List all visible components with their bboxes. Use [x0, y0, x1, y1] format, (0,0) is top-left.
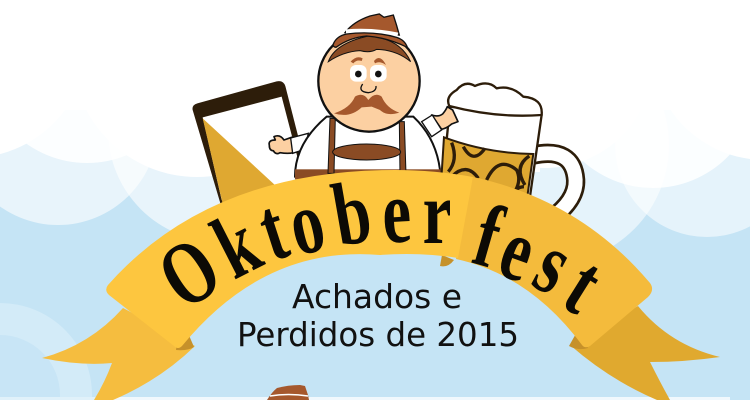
mug handle	[533, 153, 576, 218]
beer bubbles	[448, 143, 529, 200]
suspenders	[328, 118, 406, 173]
left ribbon tail	[42, 308, 195, 400]
ribbon arc right part	[456, 177, 652, 347]
left sleeve	[291, 133, 308, 153]
character: man in lederhosen	[269, 14, 458, 179]
title: Oktober fest: b	[325, 161, 378, 265]
foam	[448, 83, 542, 116]
body shirt	[295, 117, 441, 177]
beer	[440, 137, 533, 213]
title: Oktober fest: e	[379, 161, 413, 262]
title: Oktober fest: o	[279, 170, 333, 275]
ribbon banner	[42, 170, 720, 400]
icon: small hat at bottom	[267, 385, 309, 400]
eyes	[350, 65, 387, 82]
mug glass	[440, 107, 542, 220]
title: Oktober fest: O	[141, 217, 237, 328]
title: Oktober fest: f	[464, 185, 513, 287]
subtitle: Achados e	[292, 277, 462, 316]
hair	[328, 36, 411, 62]
illustration group, drawn in 3x crop coordinates	[193, 14, 576, 220]
right fold shadow	[569, 330, 588, 349]
strip at bottom edge	[0, 397, 730, 400]
right hand	[432, 107, 458, 129]
subtitle: Perdidos de 2015	[237, 315, 519, 354]
title: Oktober fest: e	[488, 198, 549, 301]
title: Oktober fest: k	[197, 192, 275, 298]
title: Oktober fest: s	[520, 213, 589, 313]
hat	[333, 14, 407, 47]
moustache	[334, 95, 399, 115]
right sleeve	[422, 115, 442, 137]
belly band	[333, 144, 401, 160]
subtitle	[237, 277, 519, 354]
icon: tablet	[193, 81, 303, 213]
right ribbon tail	[570, 306, 720, 400]
nose	[361, 84, 376, 93]
title: Oktober fest: t	[247, 178, 298, 280]
icon: beer mug	[440, 83, 576, 220]
eyebrows	[351, 57, 363, 63]
shorts	[295, 169, 441, 179]
head	[318, 30, 420, 132]
title: Oktober fest	[141, 161, 620, 332]
left fold shadow	[176, 333, 194, 350]
title: Oktober fest: t	[549, 236, 620, 332]
ribbon arc left part	[106, 170, 473, 348]
middle fold shadow	[440, 255, 454, 266]
left hand	[269, 136, 293, 154]
title: Oktober fest: r	[423, 163, 451, 263]
